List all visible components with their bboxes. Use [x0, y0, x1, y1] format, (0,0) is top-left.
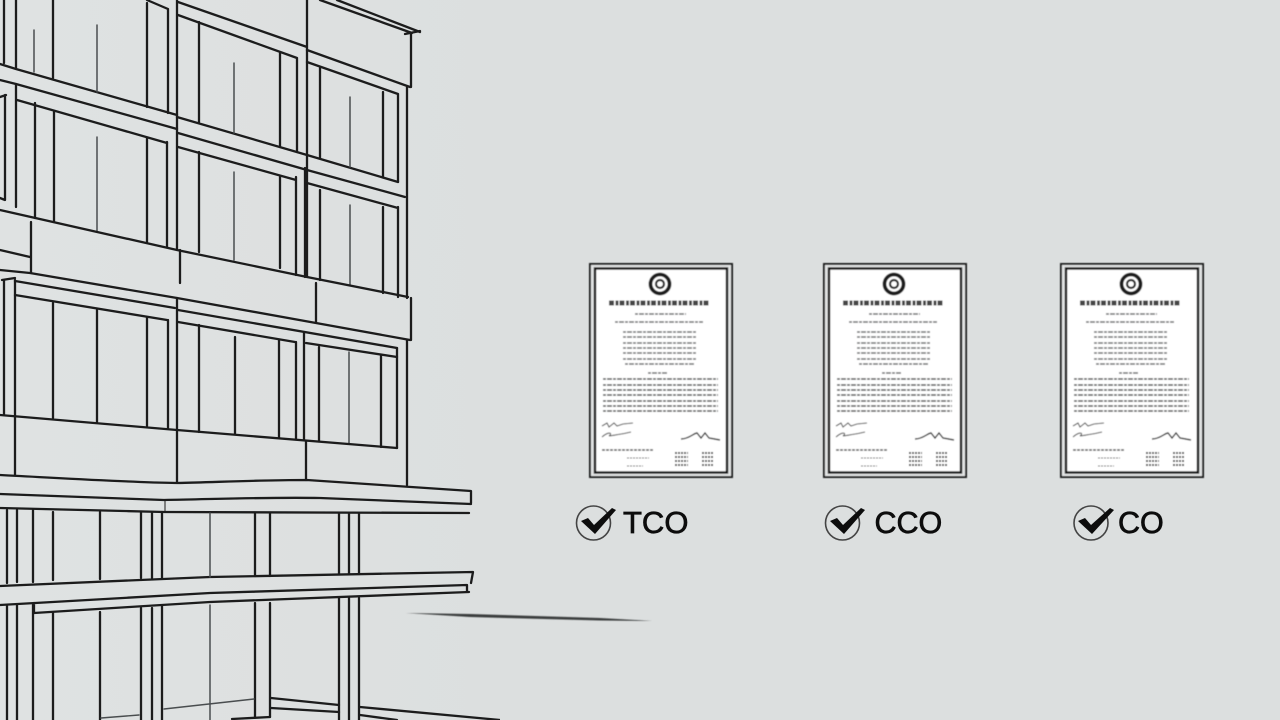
icon: check mark in circle	[826, 506, 865, 540]
certificate frame	[1061, 264, 1203, 477]
middle band and storey	[0, 222, 411, 485]
label: TCO with check	[576, 505, 688, 540]
building line drawing	[0, 0, 500, 720]
balcony ledges	[0, 475, 473, 613]
certificate body text lines	[837, 314, 952, 411]
certificate signatures and stamps	[836, 423, 954, 466]
certificate title band	[609, 300, 709, 306]
upper storey windows and frames	[0, 0, 420, 298]
ground floor perspective lines	[101, 698, 500, 720]
certificate signatures and stamps	[1073, 423, 1191, 466]
certificate body text lines	[1074, 314, 1189, 411]
certificate title band	[843, 300, 943, 306]
certificate 2: CCO	[824, 264, 966, 477]
certificate title band	[1080, 300, 1180, 306]
certificate frame	[824, 264, 966, 477]
certificate seal	[1122, 274, 1140, 294]
CCO text: CCO	[874, 506, 942, 540]
certificate 3: CO	[1061, 264, 1203, 477]
certificate frame	[590, 264, 732, 477]
TCO text: TCO	[623, 505, 688, 540]
certificate 1: TCO	[590, 264, 732, 477]
label: CCO with check	[826, 506, 942, 540]
label: CO with check	[1074, 506, 1164, 540]
ground storey columns	[7, 510, 359, 720]
certificate seal	[650, 274, 670, 294]
certificate seal	[884, 274, 904, 294]
ground shadow stroke	[406, 613, 652, 621]
certificate body text lines	[603, 314, 718, 411]
icon: check mark in circle	[576, 506, 616, 540]
icon: check mark in circle	[1074, 506, 1114, 540]
certificate signatures and stamps	[602, 423, 720, 466]
CO text: CO	[1118, 506, 1164, 540]
